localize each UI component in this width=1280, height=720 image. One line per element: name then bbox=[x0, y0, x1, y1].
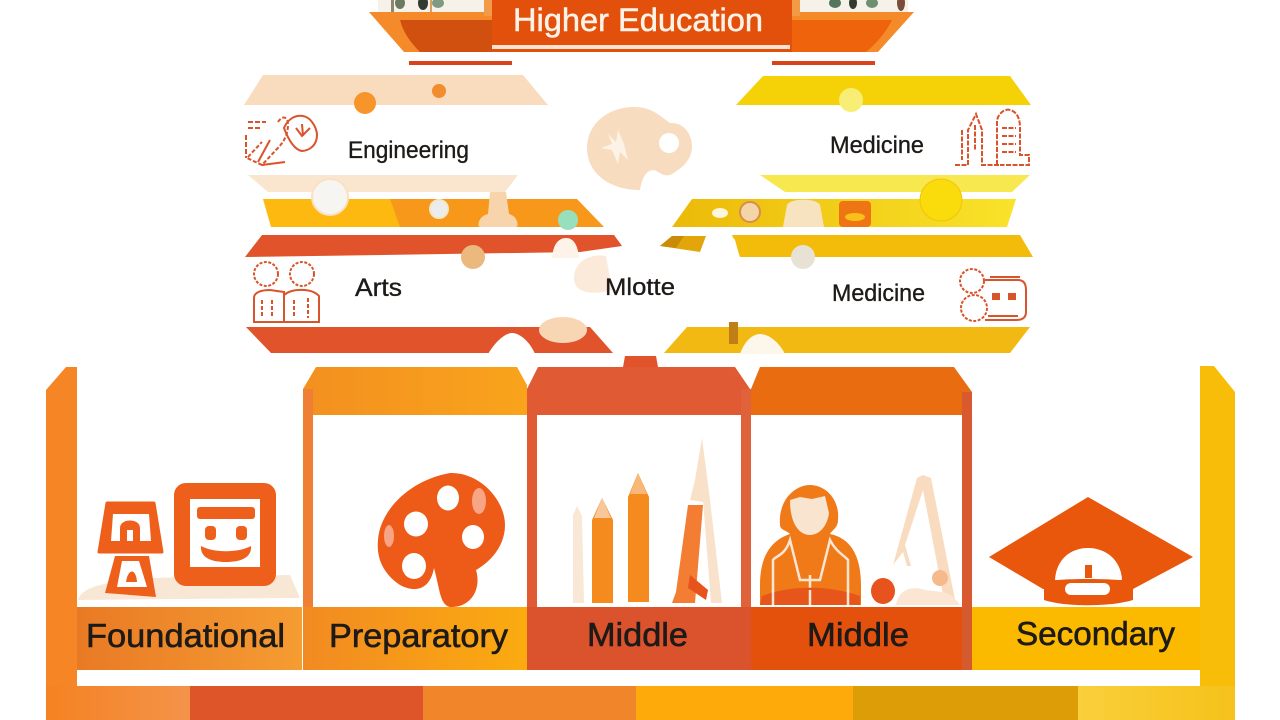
right border bbox=[741, 389, 751, 614]
band: gold upper bbox=[660, 235, 1033, 257]
panel: Middle two bbox=[751, 367, 972, 670]
arch: white lower bbox=[488, 333, 535, 354]
label border bbox=[962, 607, 972, 670]
dot: ring bbox=[740, 202, 760, 222]
plant window right bbox=[796, 0, 908, 12]
panel: Preparatory bbox=[303, 367, 527, 670]
blob: peach bbox=[539, 317, 587, 343]
segment four bbox=[636, 686, 853, 720]
label: Foundational bbox=[86, 617, 285, 654]
icon: graduation cap bbox=[989, 497, 1193, 605]
arch: white bbox=[552, 238, 579, 258]
shelf bbox=[78, 575, 300, 600]
band: gold lower bbox=[664, 327, 1030, 353]
dot: tan bbox=[461, 245, 485, 269]
dot: orange bbox=[354, 92, 376, 114]
underline right bbox=[772, 61, 875, 65]
dot: small orange bbox=[432, 84, 446, 98]
icon: palette bbox=[378, 473, 505, 607]
blob: beside middle label bbox=[574, 255, 612, 293]
right border bbox=[962, 392, 972, 607]
bag: pale bbox=[783, 200, 824, 227]
header bbox=[751, 367, 972, 415]
label bar bbox=[527, 607, 751, 670]
segment six bbox=[1078, 686, 1235, 720]
label: Arts: Arts bbox=[355, 274, 402, 302]
label: Engineering: Engineering bbox=[348, 137, 469, 164]
segment three bbox=[423, 686, 636, 720]
label: Medicine lower: Medicine bbox=[832, 280, 925, 307]
base strip bbox=[46, 686, 1235, 720]
dot: mint bbox=[558, 210, 578, 230]
icon: student bbox=[760, 485, 861, 605]
tray right bbox=[792, 0, 914, 52]
segment one bbox=[46, 686, 190, 720]
label: Mlotte: Mlotte bbox=[605, 274, 675, 301]
icon: medicine lower line art bbox=[960, 269, 1026, 321]
label bar bbox=[972, 607, 1200, 670]
band: red upper bbox=[245, 235, 622, 257]
icon: pencils and compass bbox=[573, 438, 722, 603]
pillar: right bbox=[1200, 366, 1235, 720]
box: orange bbox=[839, 201, 871, 227]
pillar: left bbox=[46, 367, 77, 720]
header bbox=[303, 367, 527, 652]
dot: grey bbox=[791, 245, 815, 269]
icon: engineering line art bbox=[246, 116, 317, 165]
dot: silver ring bbox=[430, 200, 448, 218]
label: Middle bbox=[587, 616, 688, 653]
label: Medicine upper: Medicine bbox=[830, 132, 924, 159]
connector: top of middle panel bbox=[623, 356, 658, 367]
icon: smiling face frame bbox=[174, 483, 276, 586]
dot: yellow bbox=[920, 179, 962, 221]
panel: upper right bands bbox=[660, 76, 1033, 354]
band: yellow bbox=[736, 76, 1031, 105]
plant window left bbox=[378, 0, 490, 14]
label bar bbox=[77, 607, 302, 670]
band: pale peach bbox=[248, 175, 518, 192]
label bar bbox=[303, 607, 527, 670]
arch: white lower bbox=[740, 334, 785, 354]
dot: small white bbox=[712, 208, 728, 218]
label: Secondary bbox=[1016, 615, 1176, 652]
header bbox=[527, 367, 750, 607]
band: red lower bbox=[246, 327, 613, 353]
banner: Higher Education bbox=[369, 0, 914, 65]
label: Preparatory bbox=[329, 617, 509, 654]
dot: white ring bbox=[312, 179, 348, 215]
panel: Secondary bbox=[972, 497, 1200, 670]
title: Higher Education bbox=[513, 2, 763, 38]
icon: ball bbox=[871, 578, 895, 604]
segment two bbox=[190, 686, 423, 720]
band: peach bbox=[244, 75, 548, 105]
dot: pale yellow bbox=[839, 88, 863, 112]
label: Middle bbox=[807, 616, 909, 653]
underline left bbox=[409, 61, 512, 65]
panel: Foundational bbox=[77, 483, 302, 670]
band: gold and orange bbox=[263, 199, 604, 227]
icon: central palette bbox=[587, 107, 692, 190]
panel: upper left bands bbox=[244, 75, 622, 354]
box: brown bbox=[729, 322, 738, 344]
title plate bbox=[492, 0, 792, 52]
label bar bbox=[751, 607, 972, 670]
icon: arts figures line art bbox=[254, 262, 320, 322]
band: gold to yellow bbox=[672, 199, 1016, 227]
tray left bbox=[369, 0, 492, 52]
icon: lamp bbox=[99, 503, 162, 597]
side border bbox=[303, 389, 313, 614]
panel: Middle one bbox=[527, 367, 751, 670]
icon: medicine buildings line art bbox=[955, 110, 1029, 165]
figure: peach bbox=[479, 192, 518, 227]
arch: white bbox=[708, 234, 740, 258]
segment five bbox=[853, 686, 1078, 720]
band: pale yellow bbox=[760, 175, 1030, 192]
icon: pale easel bbox=[893, 475, 960, 605]
